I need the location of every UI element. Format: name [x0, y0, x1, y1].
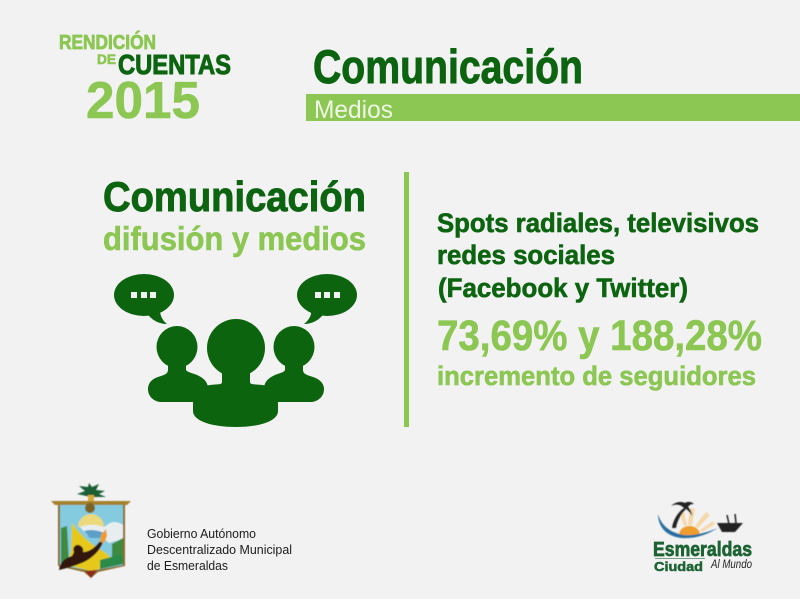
ship	[717, 523, 743, 532]
icon: three people with speech bubbles	[114, 274, 357, 427]
section bar: Medios: Medios	[314, 96, 393, 124]
icon: left person	[148, 326, 208, 402]
heading: Comunicación difusión y medios	[103, 173, 366, 257]
sun	[679, 526, 700, 535]
vertical divider	[404, 172, 409, 427]
section bar: Medios	[306, 94, 800, 124]
heading: Comunicación difusión y medios: Comunicación	[103, 173, 366, 220]
logo: Esmeraldas Ciudad al Mundo	[653, 502, 752, 574]
icon: coat of arms of Esmeraldas	[51, 483, 131, 578]
logo: Rendición de Cuentas 2015: CUENTAS	[118, 49, 231, 80]
logo: Esmeraldas Ciudad al Mundo: Esmeraldas	[653, 539, 752, 561]
text block: spots radiales: Spots radiales, televisivos	[437, 208, 759, 238]
icon: right speech bubble	[297, 274, 357, 324]
stat: 73,69% y 188,28%: 73,69% y 188,28%	[437, 312, 762, 360]
text: institution name: Descentralizado Municipal	[147, 543, 292, 557]
logo: Rendición de Cuentas 2015: 2015	[86, 72, 200, 130]
text block: spots radiales	[437, 208, 759, 303]
wave	[658, 514, 718, 538]
text block: spots radiales: redes sociales	[437, 240, 615, 270]
logo: Esmeraldas Ciudad al Mundo: Ciudad	[654, 559, 703, 574]
icon: right person	[264, 326, 324, 402]
bar	[51, 501, 131, 505]
text block: spots radiales: (Facebook y Twitter)	[438, 273, 688, 303]
icon: left speech bubble	[114, 274, 174, 324]
icon: center person	[193, 319, 278, 427]
text: institution name	[147, 527, 292, 573]
palm tree	[672, 508, 686, 528]
text: institution name: de Esmeraldas	[147, 559, 228, 573]
text: institution name: Gobierno Autónomo	[147, 527, 256, 541]
text: incremento de seguidores: incremento de seguidores	[437, 361, 756, 391]
logo: Rendición de Cuentas 2015: DE	[97, 51, 116, 67]
title: Comunicación: Comunicación	[313, 40, 583, 93]
palm	[77, 483, 106, 497]
logo: Rendición de Cuentas 2015	[59, 30, 231, 130]
logo: Esmeraldas Ciudad al Mundo: Al Mundo	[710, 557, 752, 571]
heading: Comunicación difusión y medios: difusión y medios	[103, 220, 366, 257]
shield	[58, 503, 125, 578]
logo: Rendición de Cuentas 2015: RENDICIÓN	[59, 30, 156, 54]
